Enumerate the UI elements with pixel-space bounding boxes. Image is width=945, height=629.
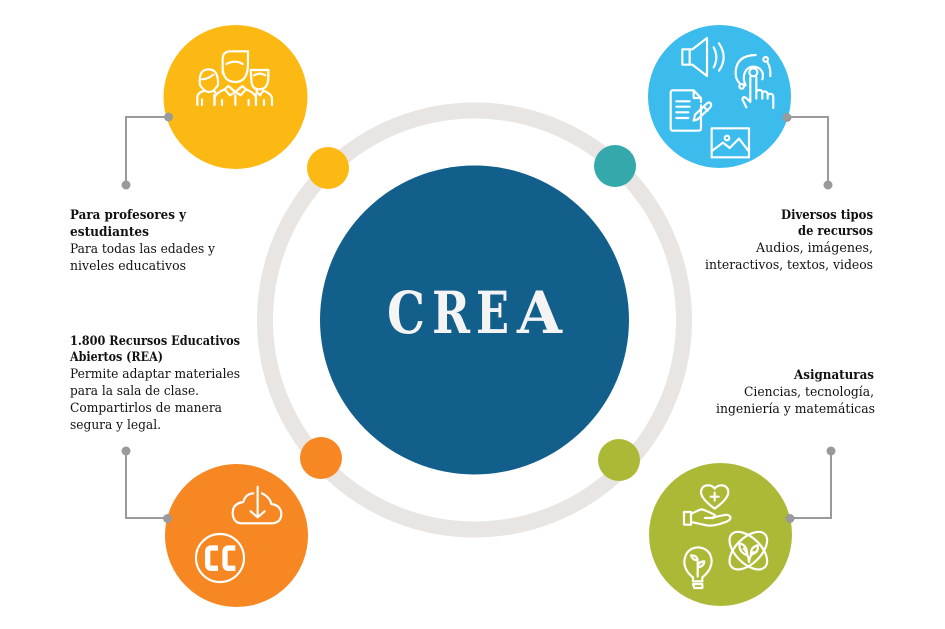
connector: bottom left bbox=[122, 446, 172, 523]
text block: Para profesores y estudiantes: estudiantes bbox=[70, 225, 149, 240]
icon: touch interactive bbox=[736, 55, 773, 108]
text block: Asignaturas: Asignaturas bbox=[793, 368, 874, 383]
title: CREA: R bbox=[432, 279, 471, 347]
title: CREA bbox=[387, 279, 563, 347]
connector: top right bbox=[782, 113, 832, 190]
text block: Asignaturas: Ciencias, tecnología, bbox=[744, 385, 874, 400]
icon: light bulb with sprout bbox=[684, 547, 712, 588]
text block: Diversos tipos de recursos: de recursos bbox=[798, 224, 873, 239]
central ring bbox=[265, 110, 684, 530]
panel: open licence circle bbox=[165, 464, 308, 607]
icon: document and pencil bbox=[671, 90, 711, 131]
text block: 1.800 Recursos Educativos Abiertos: Abiertos (REA) bbox=[69, 350, 163, 365]
text block: 1.800 Recursos Educativos Abiertos bbox=[69, 334, 240, 433]
icon: atom with leaves bbox=[723, 525, 774, 576]
text block: 1.800 Recursos Educativos Abiertos: 1.800 Recursos Educativos bbox=[70, 334, 240, 349]
text block: Diversos tipos de recursos: Audios, imágenes, bbox=[755, 241, 873, 256]
text block: Diversos tipos de recursos: Diversos tipos bbox=[781, 208, 873, 223]
panel: people circle bbox=[164, 25, 308, 169]
panel: resource types circle bbox=[648, 25, 791, 168]
panel: subjects circle bbox=[649, 463, 792, 606]
ring node: orange bbox=[300, 437, 342, 479]
title: CREA: E bbox=[476, 279, 509, 347]
text block: Para profesores y estudiantes: niveles educativos bbox=[70, 259, 186, 274]
icon: group of people bbox=[197, 51, 272, 105]
text block: 1.800 Recursos Educativos Abiertos: para la sala de clase. bbox=[70, 384, 199, 399]
text block: 1.800 Recursos Educativos Abiertos: segura y legal. bbox=[70, 418, 161, 433]
icon: cloud download bbox=[233, 487, 281, 523]
text block: 1.800 Recursos Educativos Abiertos: Permite adaptar materiales bbox=[70, 367, 240, 382]
text block: 1.800 Recursos Educativos Abiertos: Compartirlos de manera bbox=[70, 401, 222, 416]
ring node: green bbox=[598, 439, 640, 481]
ring node: yellow bbox=[307, 147, 349, 189]
ring node: teal bbox=[594, 145, 636, 187]
text block: Asignaturas: ingeniería y matemáticas bbox=[716, 402, 875, 417]
connector: bottom right bbox=[786, 446, 836, 523]
icon: CC licence bbox=[196, 534, 244, 582]
connector: top left bbox=[122, 112, 173, 190]
text block: Para profesores y estudiantes bbox=[70, 208, 216, 274]
text block: Diversos tipos de recursos bbox=[705, 208, 873, 273]
icon: image bbox=[712, 128, 749, 157]
icon: speaker bbox=[682, 38, 724, 76]
text block: Asignaturas bbox=[716, 368, 875, 417]
text block: Para profesores y estudiantes: Para todas las edades y bbox=[70, 242, 216, 257]
title: CREA: A bbox=[516, 279, 563, 347]
central circle with title bbox=[320, 166, 629, 474]
title: CREA: C bbox=[387, 279, 425, 347]
text block: Diversos tipos de recursos: interactivos, textos, videos bbox=[705, 258, 873, 273]
icon: heart in hand bbox=[684, 485, 730, 526]
text block: Para profesores y estudiantes: Para profesores y bbox=[70, 208, 186, 223]
